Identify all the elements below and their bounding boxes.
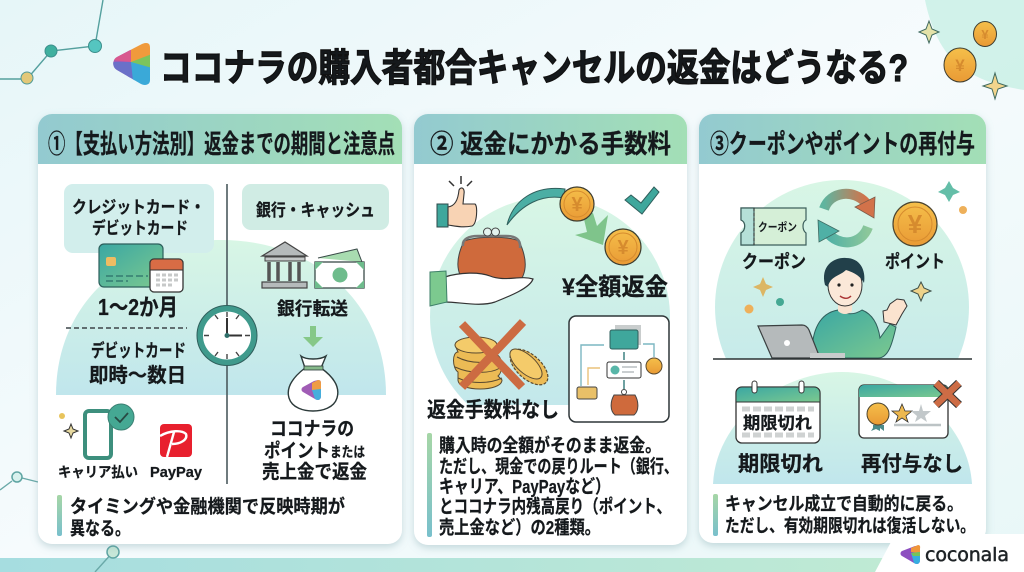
- icon: PayPay: [160, 424, 192, 457]
- icon: coupon: クーポン: [758, 221, 797, 234]
- text: coconala points: [262, 419, 367, 483]
- icon: expired calendar: [736, 381, 820, 443]
- icon: point coin: [893, 202, 937, 246]
- label: bank cash: [242, 184, 389, 230]
- label: point: ポイント: [885, 251, 945, 272]
- icon: point coin: ¥: [908, 209, 923, 239]
- dashed divider: [66, 327, 187, 329]
- label: full refund: ¥全額返金: [562, 274, 668, 301]
- panel 1 header: [38, 114, 402, 164]
- panel 1 header: ①【支払い方法別】返金までの期間と注意点: [48, 129, 395, 159]
- icon: credit card and calendar: [99, 244, 183, 292]
- note: panel 2: キャリア、PayPayなど）: [439, 476, 610, 497]
- logo: coconala tab: [875, 534, 1024, 572]
- label: carrier: キャリア払い: [58, 464, 138, 480]
- text: coconala points: ポイント: [264, 439, 330, 462]
- note: panel 2: ただし、現金での戻りルート（銀行、: [439, 456, 678, 477]
- icon: crossed coins: [454, 322, 554, 391]
- text: coconala points: ココナラの: [270, 419, 354, 440]
- icon: coins: ¥: [571, 194, 583, 216]
- label: expired: 期限切れ: [738, 453, 823, 476]
- icon: title logo: [113, 43, 150, 85]
- icon: carrier phone: [59, 404, 134, 458]
- wordmark: coconala: [925, 544, 1009, 566]
- icon: coins: [560, 187, 641, 265]
- icon: clock: [197, 306, 257, 366]
- icon: bank: [262, 242, 307, 288]
- note: panel 1: タイミングや金融機関で反映時期が: [70, 496, 345, 517]
- note: panel 2: 購入時の全額がそのまま返金。: [439, 435, 661, 456]
- decoration: coins and sparkles top right: ¥: [981, 27, 989, 42]
- note: panel 1: 異なる。: [70, 518, 130, 539]
- panel 3 header: [699, 114, 986, 164]
- icon: coupon: [741, 208, 806, 245]
- icon: money bag: [288, 356, 338, 411]
- icon: sync arrows: [818, 194, 875, 242]
- dome background: [430, 198, 670, 405]
- divider line: [713, 358, 972, 360]
- decoration: network nodes top left: [0, 0, 103, 84]
- panel: coupons and points: [699, 114, 986, 543]
- flow diagram: [569, 316, 669, 422]
- decoration: coins and sparkles top right: ¥: [955, 56, 965, 75]
- text: coconala points: 売上金で返金: [262, 461, 367, 483]
- note: panel 3: ただし、有効期限切れは復活しない。: [725, 516, 975, 536]
- note: panel 3: キャンセル成立で自動的に戻る。: [725, 493, 963, 514]
- panel: payment methods: [38, 114, 402, 544]
- divider: [226, 184, 228, 484]
- text: coconala points: または: [330, 444, 365, 460]
- label: credit card: [64, 184, 214, 253]
- icon: thumbs up: [437, 176, 477, 227]
- icon: coins: ¥: [617, 237, 629, 259]
- duration: debit: デビットカード: [91, 340, 186, 361]
- note: panel 3: [713, 493, 975, 536]
- icon: window no re-grant: [859, 383, 959, 438]
- label: bank cash: 銀行・キャッシュ: [256, 201, 375, 220]
- note: panel 2: とココナラ内残高戻り（ポイント、: [439, 496, 671, 517]
- panel 2 header: [414, 114, 687, 164]
- icon: banknotes: [315, 249, 364, 288]
- note: panel 2: [427, 433, 678, 538]
- label: credit card: クレジットカード・: [72, 198, 205, 217]
- duration: credit: 1〜2か月: [98, 294, 178, 320]
- icon: coconala mark: [900, 545, 920, 564]
- duration: debit: 即時〜数日: [89, 364, 186, 387]
- label: no re-grant: 再付与なし: [861, 453, 963, 476]
- label: no fee: 返金手数料なし: [427, 399, 559, 422]
- lower dome background: [713, 372, 972, 484]
- illustration: person with laptop: [758, 258, 907, 358]
- arrow: curved: [507, 188, 565, 225]
- note: panel 1: [57, 495, 345, 539]
- label: coupon: クーポン: [742, 251, 806, 272]
- duration: debit: [89, 340, 186, 387]
- panel: refund fees: [414, 114, 687, 545]
- panel 2 header: ② 返金にかかる手数料: [430, 129, 671, 159]
- icon: purse on hand: [430, 228, 533, 306]
- icon: expired calendar: 期限切れ: [743, 414, 812, 433]
- label: PayPay: PayPay: [150, 464, 203, 481]
- sparkles: [744, 181, 967, 314]
- arrow: green down: [575, 213, 608, 245]
- arrow: down: [303, 326, 323, 347]
- label: bank transfer: 銀行転送: [277, 299, 348, 319]
- label: credit card: デビットカード: [92, 218, 188, 238]
- note: panel 2: 売上金など）の2種類。: [439, 517, 600, 538]
- dome background: [715, 180, 969, 358]
- decoration: coins and sparkles top right: [919, 21, 1007, 99]
- icon: check: [625, 187, 659, 214]
- dome background: [56, 240, 386, 395]
